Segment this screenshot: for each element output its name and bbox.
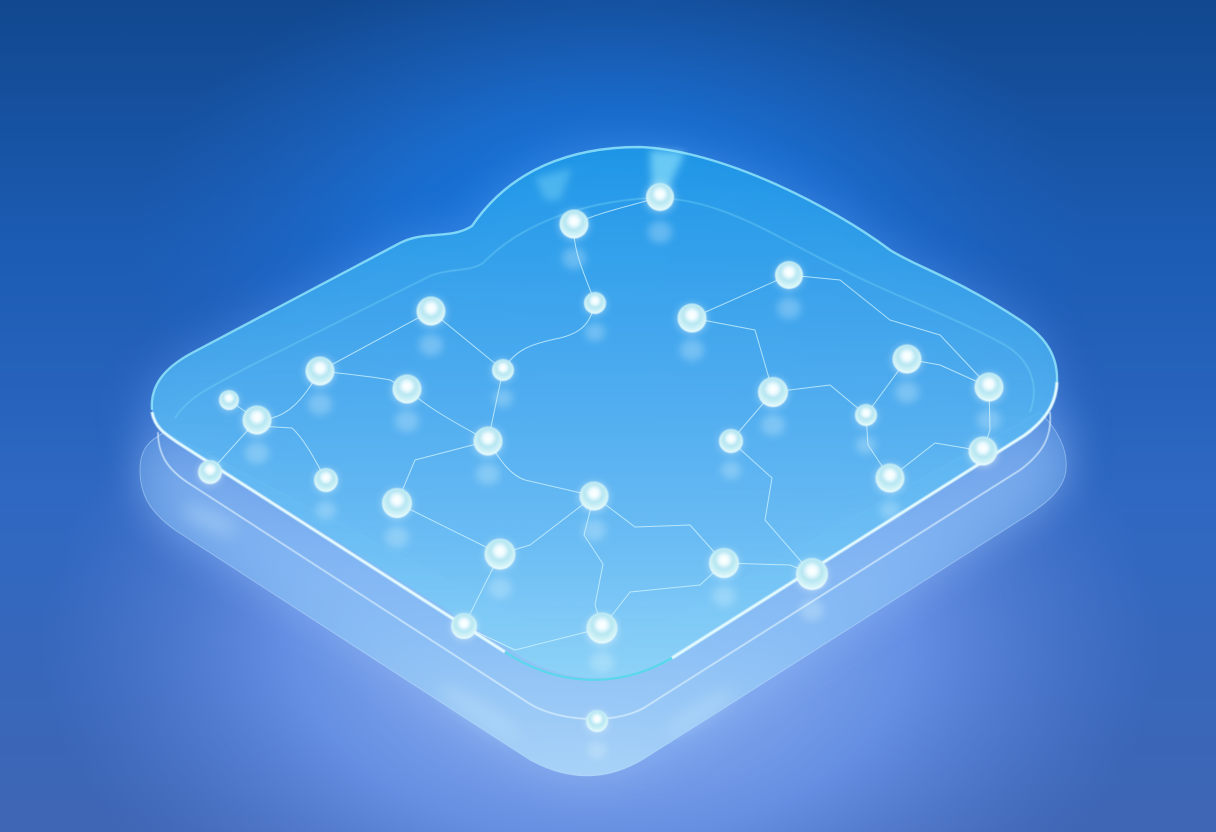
bright front edge <box>152 412 505 652</box>
band highlights <box>179 498 740 748</box>
network connection lines <box>210 197 990 650</box>
main glass plate <box>152 147 1057 680</box>
lower glass slab <box>140 412 1066 776</box>
top edge <box>152 147 1057 410</box>
node glows <box>198 183 1004 733</box>
inner rim <box>175 198 1034 418</box>
top highlights <box>650 150 685 190</box>
node pearls <box>198 183 1004 732</box>
node reflections <box>245 221 1001 759</box>
plate halo <box>140 147 1066 755</box>
network nodes <box>198 183 1004 759</box>
